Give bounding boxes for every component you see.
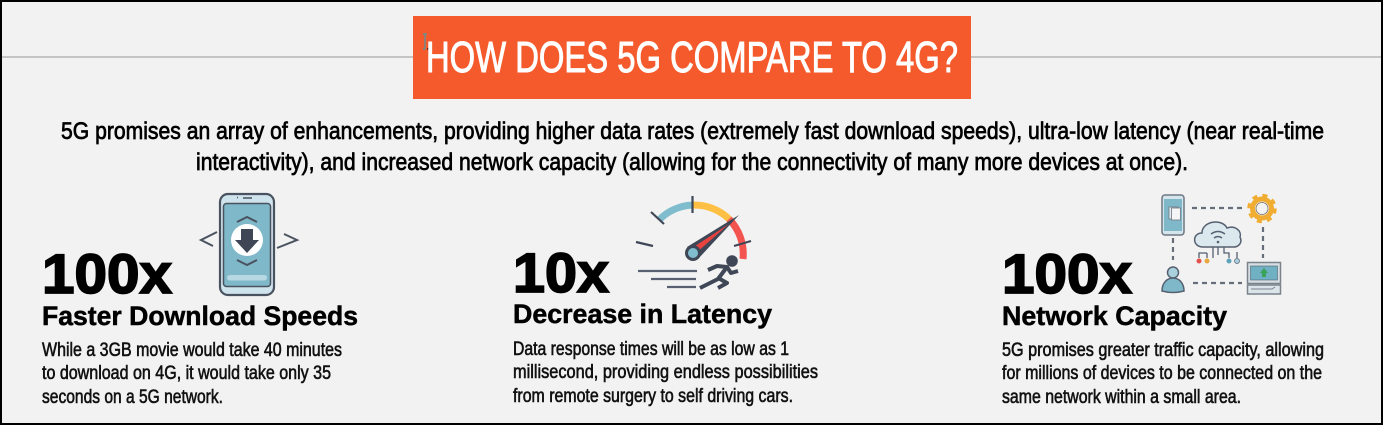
heading: network capacity: Network Capacity [1002, 301, 1227, 331]
text: download description: to download on 4G, it would take only 35 [42, 363, 331, 384]
panel: latency [513, 196, 818, 407]
text: latency description: Data response times will be as low as 1 [513, 339, 789, 360]
text: latency description [513, 339, 818, 407]
title banner: HOW DOES 5G COMPARE TO 4G? [426, 33, 958, 82]
intro paragraph: interactivity), and increased network capacity (allowing for the connectivity of many more devices at once). [196, 149, 1188, 176]
text: download description: seconds on a 5G network. [42, 387, 223, 408]
icon: connected devices and cloud [1162, 195, 1280, 294]
text: network description: 5G promises greater traffic capacity, allowing [1002, 340, 1324, 361]
panel: download speeds [42, 194, 358, 408]
text: download description [42, 340, 342, 408]
title banner [413, 16, 971, 99]
text: network description: same network within a small area. [1002, 387, 1241, 408]
stat: 100x: 100x [42, 242, 172, 305]
icon: phone with download arrow [201, 194, 297, 295]
heading: decrease in latency: Decrease in Latency [513, 299, 772, 329]
stat: 100x: 100x [1002, 242, 1132, 305]
icon: speedometer with runner [636, 196, 751, 288]
text: latency description: from remote surgery to self driving cars. [513, 386, 793, 407]
stat: 10x: 10x [513, 241, 609, 304]
text: network description [1002, 340, 1324, 408]
text: download description: While a 3GB movie would take 40 minutes [42, 340, 342, 361]
text: latency description: millisecond, providing endless possibilities [513, 362, 818, 383]
panel: network capacity [1002, 195, 1324, 408]
text: network description: for millions of devices to be connected on the [1002, 363, 1322, 384]
intro paragraph [61, 118, 1324, 176]
heading: faster download speeds: Faster Download Speeds [42, 301, 358, 331]
